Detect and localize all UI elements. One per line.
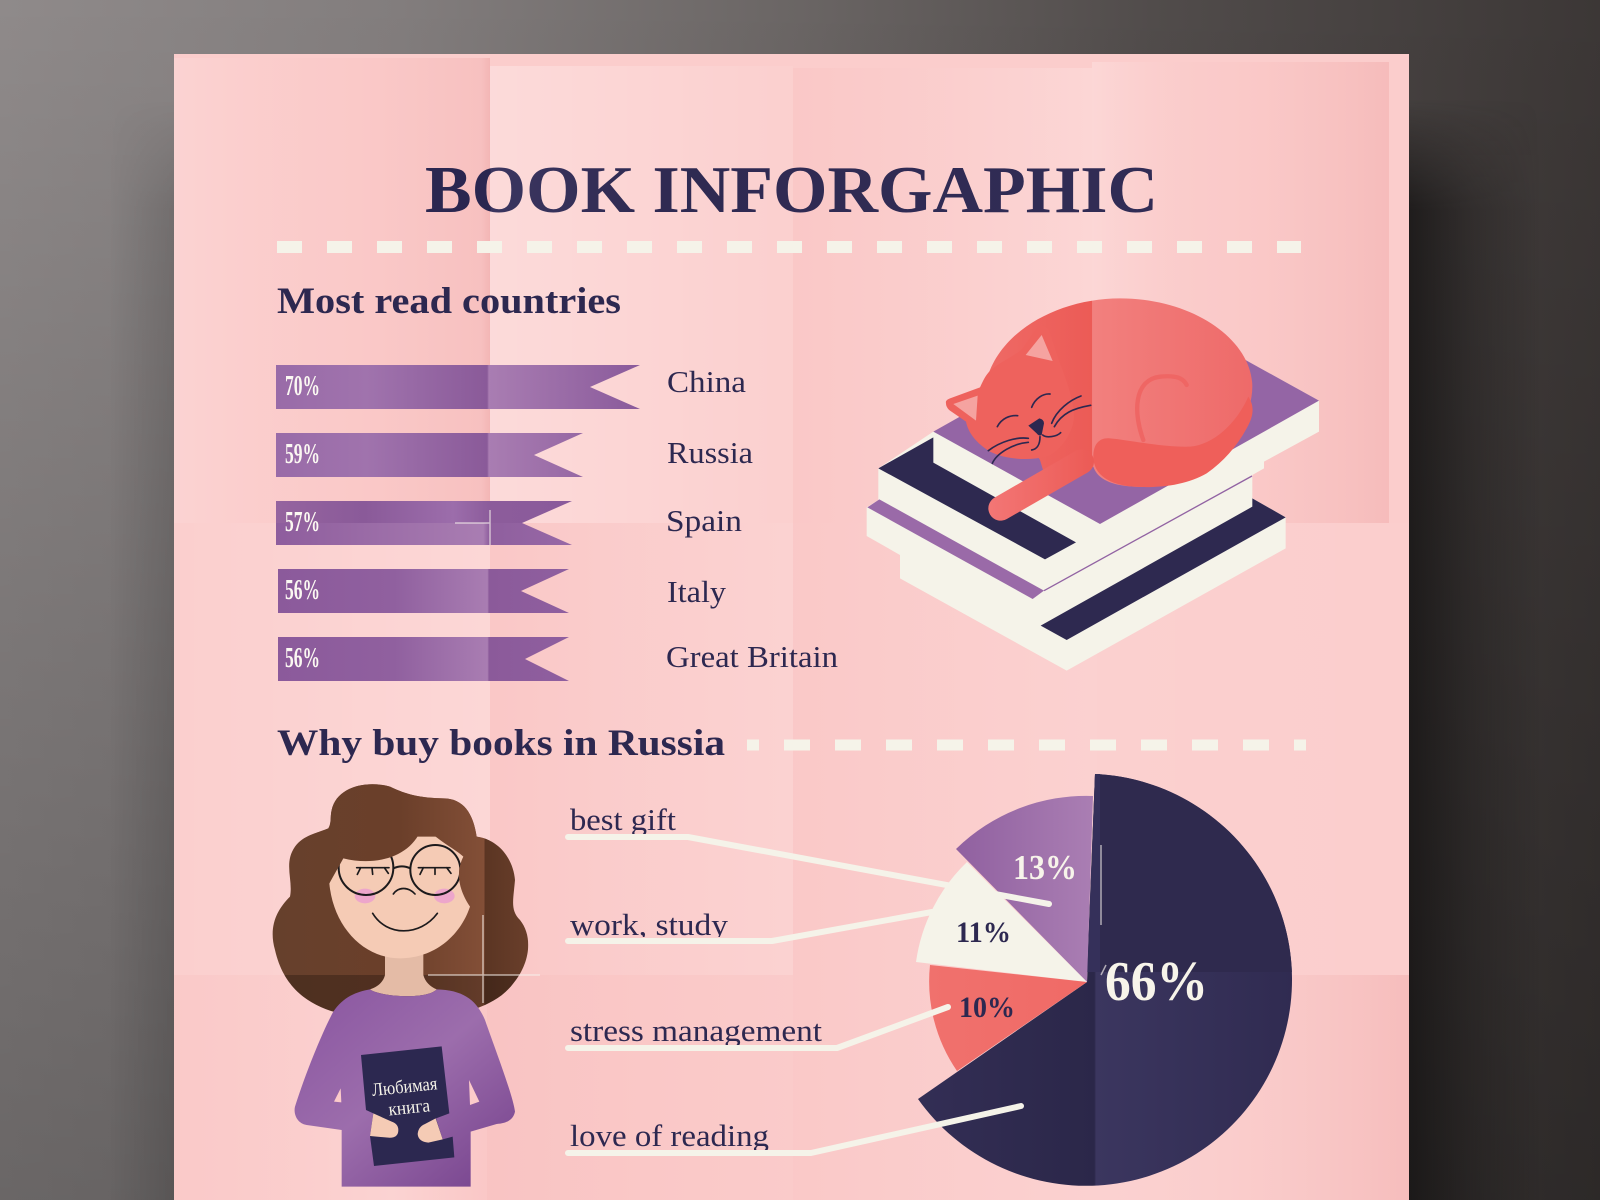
book: Любимая xyxy=(371,1073,439,1101)
ribbon bar chart: most read countries xyxy=(276,364,839,681)
bar: Russia 59%: Russia xyxy=(667,435,753,470)
bar: Spain 57%: Spain xyxy=(666,503,743,538)
illustration: cat sleeping on books xyxy=(867,298,1319,671)
bar: Great Britain 56%: 56% xyxy=(285,642,320,674)
value: 13%: 13% xyxy=(1013,848,1077,887)
value: 66%: 66% xyxy=(1105,951,1208,1013)
pie chart: why buy books xyxy=(916,774,1292,1186)
slice: stress management 10% xyxy=(929,965,1087,1071)
leader line: best gift xyxy=(568,837,1049,904)
paper creases xyxy=(428,510,1106,1003)
book: книга xyxy=(387,1095,432,1120)
icon: stack of books xyxy=(867,308,1319,671)
value: 11%: 11% xyxy=(956,916,1011,949)
bar: China 70%: 70% xyxy=(285,370,320,402)
bar: Italy 56% xyxy=(278,569,727,613)
title: BOOK INFORGAPHIC xyxy=(425,153,1158,227)
legend labels and leader lines xyxy=(568,802,1049,1153)
fringe xyxy=(316,784,490,906)
bar: Spain 57% xyxy=(276,501,743,545)
hair xyxy=(267,777,533,1017)
leader line: stress management xyxy=(568,1007,948,1048)
bar: Italy 56%: Italy xyxy=(667,574,727,609)
value: 10%: 10% xyxy=(959,991,1015,1024)
leader line: love of reading xyxy=(568,1106,1021,1153)
sweater xyxy=(295,989,515,1187)
face details xyxy=(357,868,451,931)
bar: Russia 59% xyxy=(276,433,753,477)
heading: why buy books in Russia: Why buy books in Russia xyxy=(277,723,725,764)
illustration: girl with favourite book xyxy=(267,777,533,1187)
slice: love of reading 66% xyxy=(918,774,1292,1186)
book xyxy=(361,1046,454,1166)
leader line: work, study xyxy=(568,912,932,941)
cheeks xyxy=(355,889,455,903)
paper sheet with folds xyxy=(174,54,1409,1200)
glasses xyxy=(339,840,460,895)
slice: best gift 13% xyxy=(956,796,1093,982)
bar: Great Britain 56% xyxy=(278,637,839,681)
face xyxy=(329,837,470,958)
bar: Great Britain 56%: Great Britain xyxy=(666,639,839,674)
slice: work, study 11% xyxy=(916,862,1087,982)
arm gaps xyxy=(334,1080,479,1105)
hands xyxy=(370,1113,443,1143)
label: best gift: best gift xyxy=(570,802,676,837)
label: stress management: stress management xyxy=(570,1013,822,1048)
bar: Italy 56%: 56% xyxy=(285,574,320,606)
label: love of reading: love of reading xyxy=(570,1118,769,1153)
heading: most read countries: Most read countries xyxy=(277,281,621,322)
label: work, study: work, study xyxy=(570,907,729,942)
bar: Spain 57%: 57% xyxy=(285,506,320,538)
bar: China 70%: China xyxy=(667,364,746,399)
bar: Russia 59%: 59% xyxy=(285,438,320,470)
neck xyxy=(370,950,437,996)
icon: cat xyxy=(946,298,1253,508)
bar: China 70% xyxy=(276,364,746,409)
